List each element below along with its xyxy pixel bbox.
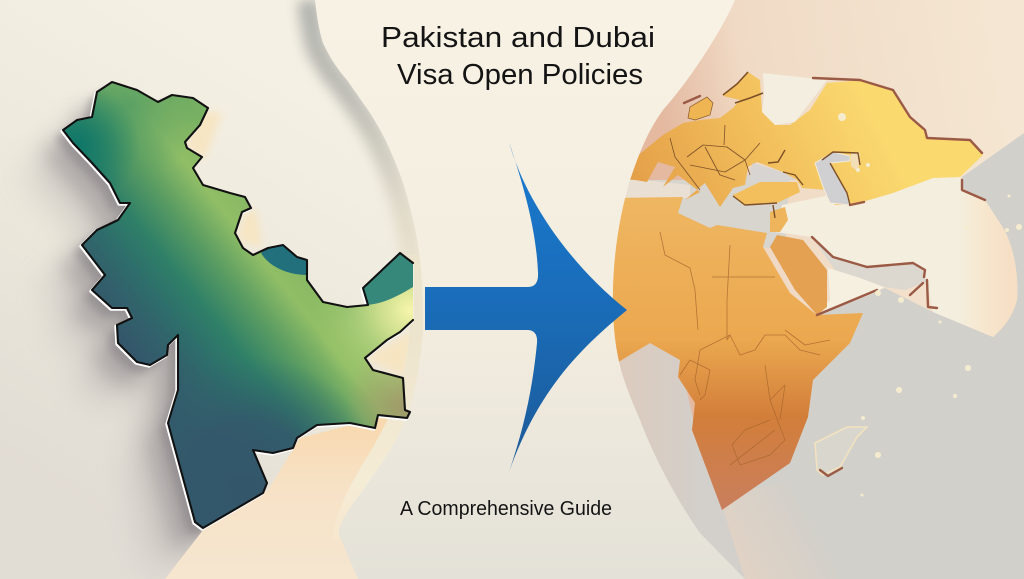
subtitle: A Comprehensive Guide <box>400 498 612 520</box>
map: Africa <box>600 197 863 510</box>
Pakistan black outline <box>63 82 413 528</box>
ocean <box>690 133 1024 579</box>
map: Britain island <box>688 97 713 120</box>
panel: right background <box>600 0 1024 579</box>
title: Pakistan and Dubai <box>381 22 655 54</box>
title <box>381 22 655 91</box>
ocean warm corner <box>690 480 860 579</box>
map: Caspian Sea <box>815 152 850 205</box>
map: small island dots <box>838 113 1022 496</box>
Pakistan teal patch east <box>363 253 413 305</box>
Pakistan white rim <box>62 83 412 529</box>
map: Pakistan <box>50 70 420 540</box>
arrow pointing from Pakistan to the world map <box>425 142 627 472</box>
map: Arabia <box>770 235 827 315</box>
map: Europe and Asia land <box>610 72 983 207</box>
map: Levant coast <box>770 207 788 232</box>
panel: left curved fold band <box>308 0 423 540</box>
shadows cast by Pakistan map <box>26 88 203 568</box>
map: Black Sea <box>747 163 797 182</box>
Pakistan gradient fill <box>64 83 413 526</box>
map region: Arabian peninsula tip <box>817 268 884 315</box>
map: pale shore east of Caspian <box>851 153 860 172</box>
map region: Mediterranean sea and west Africa ocean <box>610 170 790 579</box>
panel: left background <box>0 0 460 579</box>
map: dark European coast and border lines <box>670 72 860 218</box>
panel: centre column <box>315 0 745 579</box>
map region: Persian Gulf <box>812 237 926 290</box>
map: Turkey <box>733 182 800 205</box>
title: Visa Open Policies <box>397 59 643 91</box>
map: brown coastline strokes <box>684 78 985 476</box>
Pakistan teal patch north <box>261 245 307 275</box>
shadow: peach glow under Pakistan <box>165 415 410 579</box>
shadow: soft glows beside Pakistan coast <box>186 112 414 378</box>
map region: Middle East and Asia landmass <box>775 177 1017 337</box>
map: Scandinavia pale cap <box>762 73 827 125</box>
map: Madagascar <box>815 427 867 475</box>
map: African borders <box>660 232 830 465</box>
